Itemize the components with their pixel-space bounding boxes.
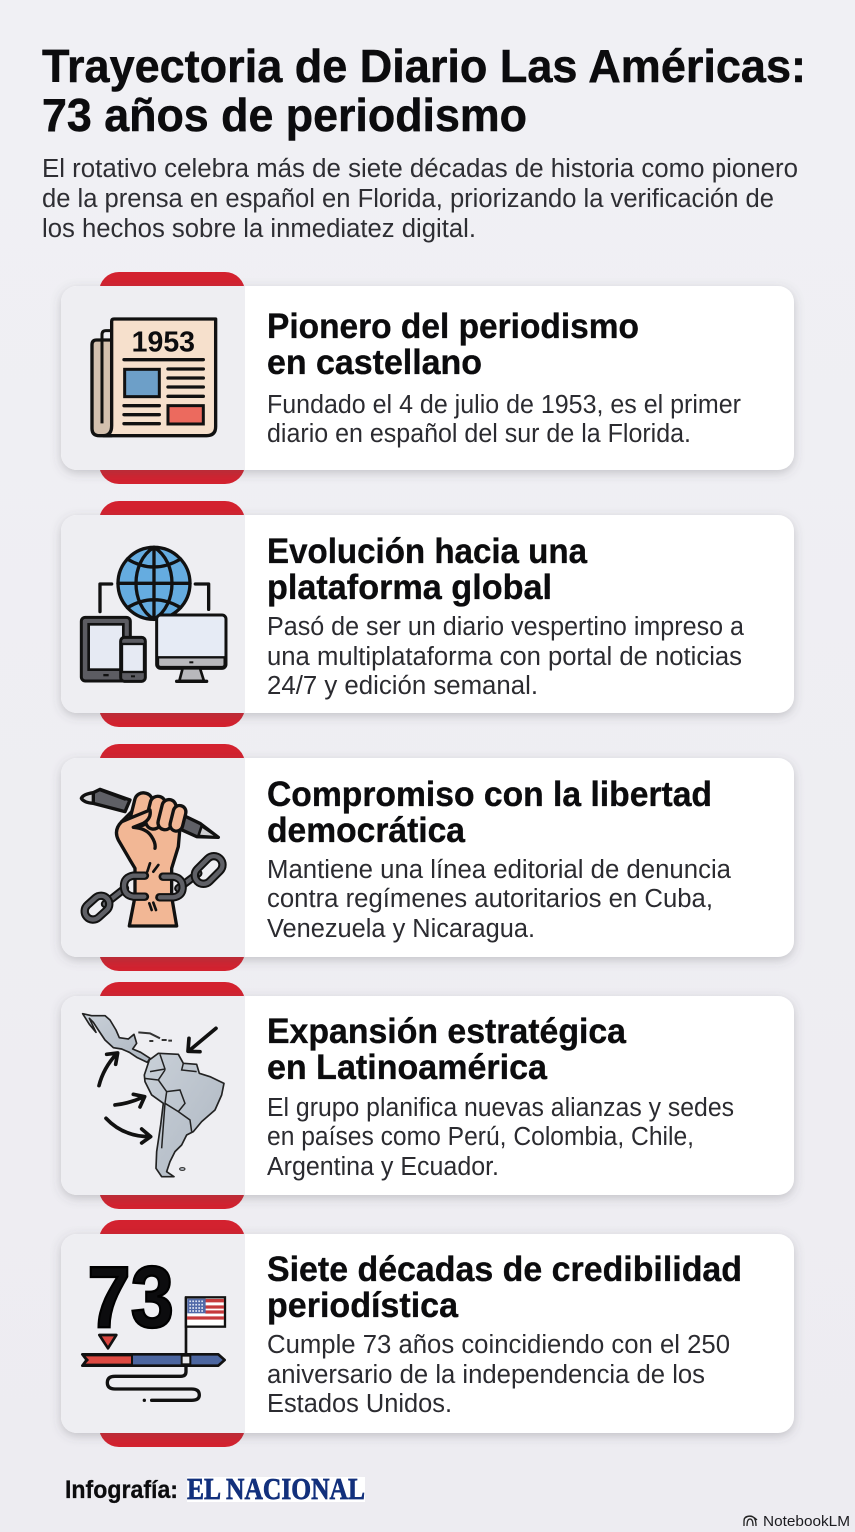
footer credit: EL NACIONAL (187, 1471, 365, 1506)
body text: Fundado el 4 de julio de 1953, es el primer (267, 391, 741, 419)
body text: Pasó de ser un diario vespertino impreso a (267, 613, 745, 641)
heading: Expansión estratégica (267, 1012, 627, 1051)
body text: diario en español del sur de la Florida. (267, 420, 691, 448)
body text: Argentina y Ecuador. (267, 1153, 499, 1181)
subtitle text: los hechos sobre la inmediatez digital. (42, 215, 476, 243)
icon: globe and devices (81, 547, 226, 681)
heading (267, 307, 639, 382)
panel: pionero del periodismo (61, 272, 794, 484)
heading: en castellano (267, 343, 482, 382)
heading: periodística (267, 1286, 459, 1325)
body text: contra regímenes autoritarios en Cuba, (267, 885, 713, 913)
body text: Cumple 73 años coincidiendo con el 250 (267, 1331, 730, 1359)
body text (267, 1331, 730, 1418)
heading: Siete décadas de credibilidad (267, 1250, 742, 1289)
title: 73 años de periodismo (42, 89, 527, 141)
body text (267, 613, 745, 700)
NotebookLM mark: NotebookLM (763, 1514, 850, 1530)
body text: Venezuela y Nicaragua. (267, 915, 535, 943)
subtitle text: de la prensa en español en Florida, priorizando la verificación de (42, 185, 774, 213)
icon: fist with pen and broken chain (81, 789, 226, 926)
panel: expansión en Latinoamérica (61, 982, 794, 1209)
icon: 73 with flag and timeline (82, 1248, 225, 1402)
heading (267, 1012, 627, 1087)
subtitle text: El rotativo celebra más de siete décadas de historia como pionero (42, 155, 798, 183)
heading: Evolución hacia una (267, 532, 587, 571)
panel: siete décadas de credibilidad (61, 1220, 794, 1447)
title: Trayectoria de Diario Las Américas: (42, 40, 806, 92)
subtitle text (42, 155, 798, 243)
body text (267, 1094, 734, 1181)
body text (267, 391, 741, 448)
body text: Estados Unidos. (267, 1390, 452, 1418)
footer credit: Infografía: (65, 1476, 178, 1504)
heading (267, 775, 712, 850)
heading: Compromiso con la libertad (267, 775, 712, 814)
body text: Mantiene una línea editorial de denuncia (267, 856, 732, 884)
body text (267, 856, 732, 943)
heading: democrática (267, 811, 466, 850)
icon: map of Latin America with arrows (83, 1014, 224, 1177)
icon: newspaper 1953: 1953 (132, 326, 195, 358)
heading (267, 532, 587, 607)
body text: El grupo planifica nuevas alianzas y sedes (267, 1094, 734, 1122)
footer credit (65, 1471, 365, 1506)
body text: aniversario de la independencia de los (267, 1361, 705, 1389)
panel: plataforma global (61, 501, 794, 727)
body text: 24/7 y edición semanal. (267, 672, 538, 700)
heading: en Latinoamérica (267, 1048, 548, 1087)
heading: plataforma global (267, 568, 552, 607)
title (42, 40, 806, 141)
panel: libertad democrática (61, 744, 794, 971)
icon: newspaper 1953 (92, 319, 216, 436)
body text: en países como Perú, Colombia, Chile, (267, 1123, 694, 1151)
icon: 73 with flag and timeline: 73 (87, 1248, 174, 1346)
heading (267, 1250, 742, 1325)
body text: una multiplataforma con portal de noticias (267, 643, 742, 671)
heading: Pionero del periodismo (267, 307, 639, 346)
